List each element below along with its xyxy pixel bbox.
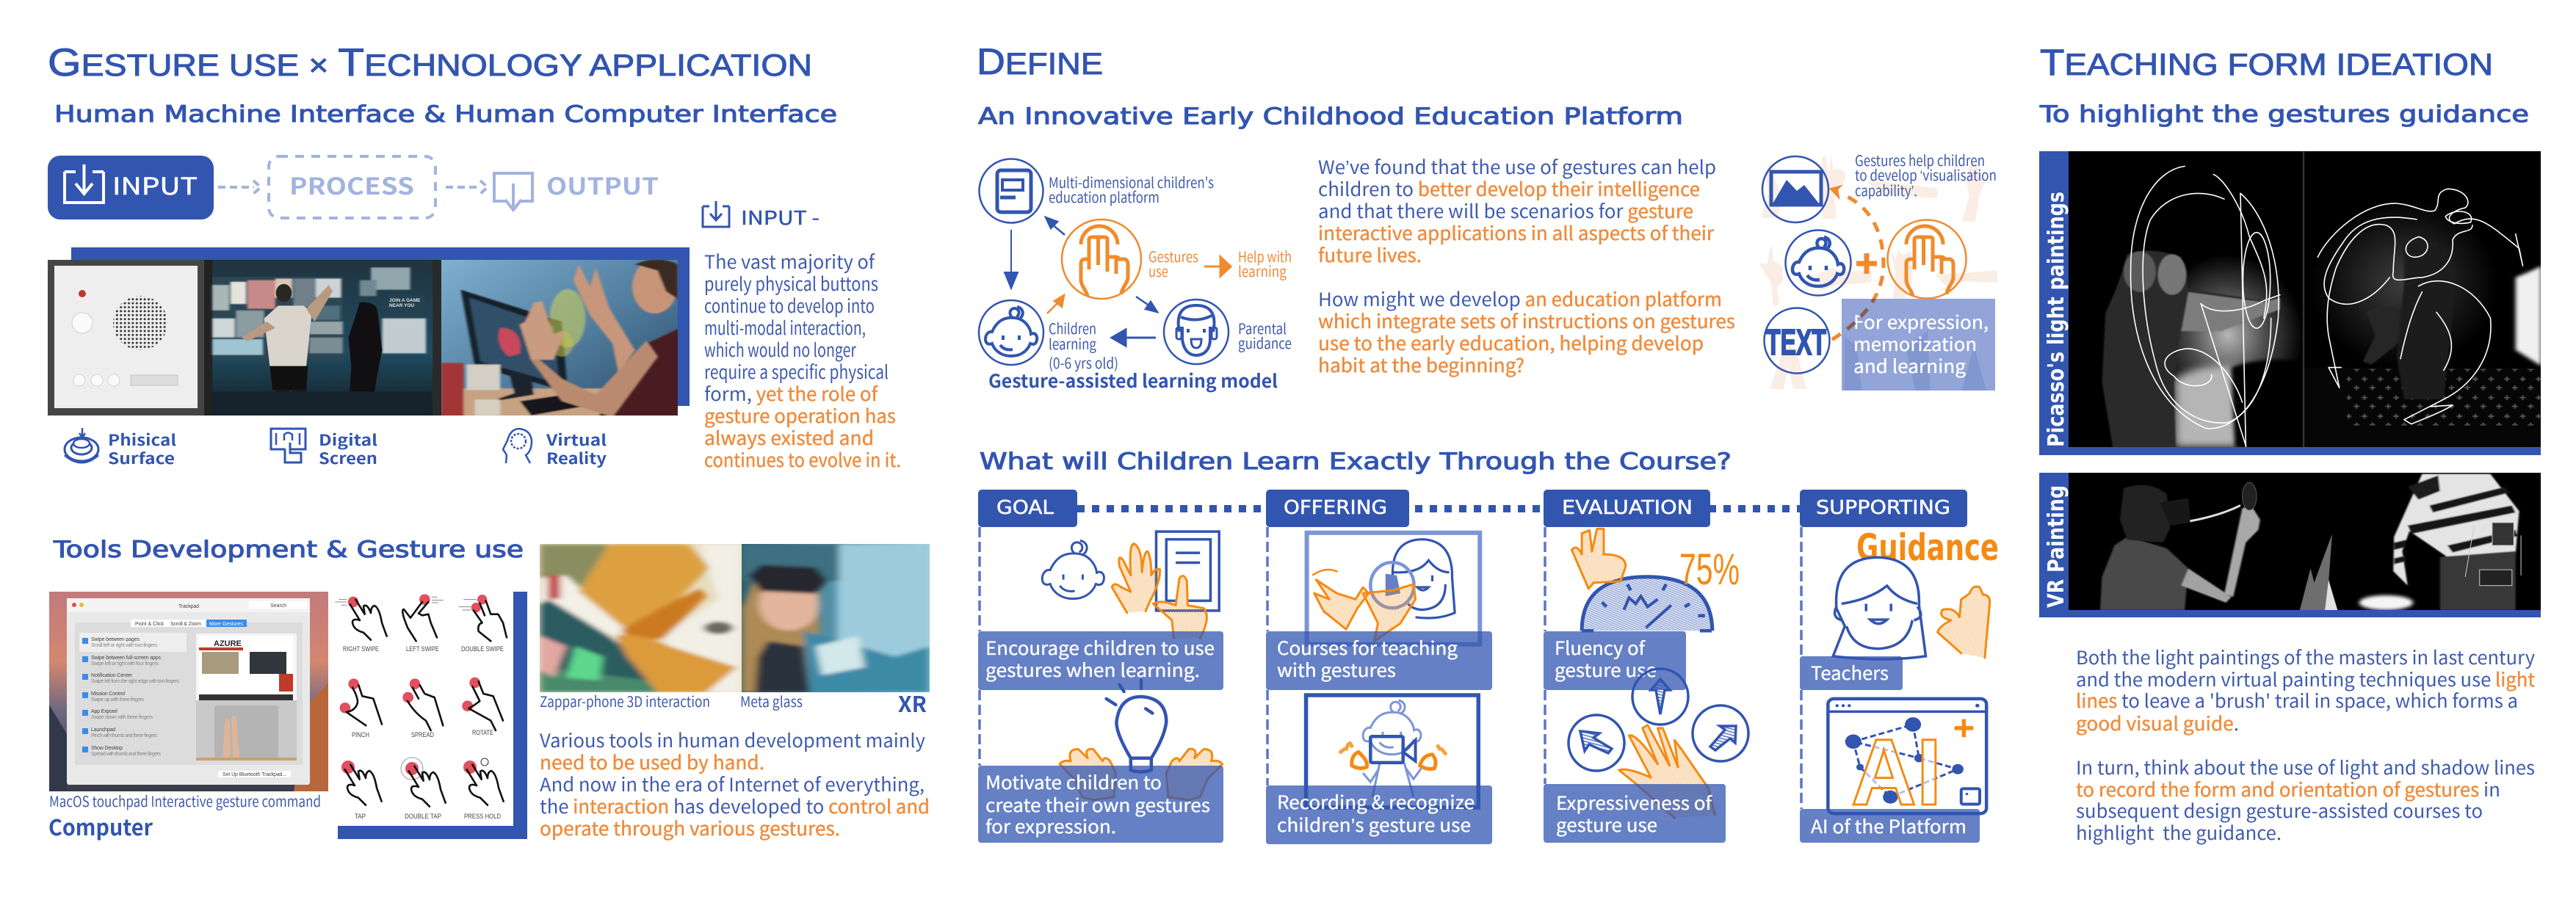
image: macos trackpad settings: Swipe left or right with four fingers [91,661,159,667]
arrow: process to output [446,181,488,194]
header: offering: OFFERING [1284,497,1387,519]
node: children learning: learning [1049,333,1096,354]
timeline connector [1077,505,1800,512]
image: macos trackpad settings: Swipe left from the right edge with two fingers [91,679,179,684]
blue backing rectangle [71,247,690,406]
text: input explanation: continue to develop into [704,291,875,319]
text: help with learning [1238,245,1292,281]
text: light lines explanation: In turn, think about the use of light and shadow lines [2076,753,2535,780]
illustration: ai platform window: AI [1851,720,1942,825]
illustration: gauge with hand [1571,529,1740,631]
image: macos trackpad settings: Scroll left or right with two fingers [91,643,157,648]
text: gestures help children: capability’. [1855,179,1917,200]
text: findings paragraph: How might we develop an education platform [1318,285,1722,312]
circle icon: text: TEXT [1766,323,1826,363]
image: macos trackpad settings: Swipe down with three fingers [91,715,153,720]
image: macos trackpad settings: Launchpad [91,727,115,733]
image: macos trackpad settings: Show Desktop [91,746,123,751]
subheading: human machine interface: Human Machine Interface & Human Computer Interface [54,101,837,128]
text: input explanation: continues to evolve in it. [704,446,901,473]
node: children learning: (0-6 yrs old) [1049,352,1118,373]
node: parental guidance: Parental [1238,317,1287,338]
plus sign [1856,253,1877,274]
image panel: picasso light paintings [2039,151,2541,455]
illustration: recording child [1306,695,1478,807]
input heading: INPUT - [741,203,820,231]
text box: for expression [1842,299,1995,391]
label: virtual reality [503,429,607,469]
text: gestures help children: to develop ‘visualisation [1855,164,1997,185]
image: macos trackpad settings: Swipe up with three fingers [91,697,144,703]
node: platform: education platform [1049,186,1159,207]
node: children learning: Children [1049,317,1096,338]
image: macos trackpad settings [49,592,328,791]
title: teaching form ideation: TEACHING FORM IDEATION [2040,42,2493,83]
gesture: rotate: ROTATE [472,729,493,737]
text box: motivate: for expression. [985,813,1116,839]
header: supporting: SUPPORTING [1816,497,1950,519]
flow: input process output [48,156,659,219]
text box: motivate [978,766,1223,843]
text box: courses: with gestures [1277,656,1396,683]
text box: courses: Courses for teaching [1277,634,1458,661]
header: evaluation [1544,490,1710,527]
image: macos trackpad settings: Scroll & Zoom [170,622,201,627]
image: digital screen wall: NEAR YOU [389,303,414,308]
text: light lines explanation: highlight the guidance. [2076,819,2282,846]
arrow: parent to children [1112,330,1156,346]
text: tools paragraph: the interaction has developed to control and [540,792,930,819]
text box: ai of the platform [1800,809,1980,843]
image: digital screen wall: JOIN A GAME [389,298,421,303]
text: input explanation: always existed and [704,424,874,451]
label: phisical surface [65,428,176,469]
dashed rail [978,527,981,766]
gesture: tap [341,761,382,821]
gesture: double swipe [459,595,507,653]
dashed rail [1800,527,1803,809]
text: input explanation: gesture operation has [704,402,896,429]
side label: vr painting: VR Painting [2044,485,2069,608]
label: digital screen [271,429,377,469]
image: macos trackpad settings: Point & Click [135,622,164,627]
title: gesture use x technology application: GESTURE USE × TECHNOLOGY APPLICATION [48,41,812,84]
text: light lines explanation: good visual guide . [2076,709,2239,736]
caption: macos touchpad: MacOS touchpad Interactive gesture command [49,790,321,811]
text: input explanation: purely physical buttons [704,269,878,297]
dashed arrow [1828,185,1884,342]
text box: teachers: Teachers [1811,659,1889,686]
panel: gesture use x technology application [48,41,930,842]
node: gestures use: use [1148,260,1168,281]
label: virtual reality: Reality [546,447,607,469]
text: input explanation [704,247,901,473]
photo: vr painters [2069,473,2541,610]
dashed rail [1544,527,1546,784]
gesture: spread: SPREAD [411,731,434,739]
subheading: innovative platform: An Innovative Early Childhood Education Platform [978,104,1683,130]
text box: ai of the platform: AI of the Platform [1811,813,1967,839]
text: help with learning: learning [1238,260,1287,281]
text box: recording: Recording & recognize [1277,788,1475,815]
illustration: speech arrows with hand [1569,669,1748,818]
text box: expressiveness [1544,784,1726,843]
illustration: light bulb with hands [1060,680,1223,800]
image: macos trackpad settings: Swipe between full-screen apps [91,656,162,661]
image: macos trackpad settings: Notification Center [91,673,133,678]
illustration: teacher teaching gestures [1307,533,1480,645]
text box: expressiveness: Expressiveness of [1556,789,1712,816]
text: light lines explanation: subsequent design gesture-assisted courses to [2076,796,2483,824]
column: goal [978,490,1223,843]
node: children learning [979,300,1118,373]
dashed rail [1266,527,1269,785]
illustration: ai platform window [1828,699,1986,825]
text: gestures help children [1855,149,1997,200]
header: goal [978,490,1077,527]
gesture: double tap: DOUBLE TAP [405,813,441,821]
text box: encourage [978,631,1223,690]
header: evaluation: EVALUATION [1562,497,1693,519]
text: findings paragraph: and that there will be scenarios for gesture [1318,197,1693,224]
text box: motivate: create their own gestures [985,791,1210,818]
chart: gesture-assisted learning model [979,159,1292,393]
gesture: right swipe [336,597,387,653]
column: evaluation [1544,490,1748,843]
image: macos trackpad settings: Mission Control [91,692,125,697]
text: input explanation: which would no longer [704,335,856,363]
subheading: what will children learn: What will Children Learn Exactly Through the Course? [980,449,1732,475]
image: macos trackpad settings: Trackpad [178,604,199,609]
input button: INPUT [112,168,198,202]
caption: meta glass: Meta glass [740,690,803,711]
text box: teachers [1800,656,1903,690]
diagram: gestures help visualisation [1759,149,1997,391]
text: tools paragraph: operate through various gestures. [540,814,840,841]
image: macos trackpad settings: Search [270,603,286,609]
image: macos trackpad settings: Swipe between pages [91,637,140,642]
arrow: gestures to platform [1046,217,1065,235]
image: zappar phone 3d interaction [540,544,742,692]
text box: expressiveness: gesture use [1556,811,1657,838]
handwritten word: guidance: Guidance [1856,526,1999,569]
text: input explanation: form, yet the role of [704,380,879,407]
text box: for expression: memorization [1853,330,1977,357]
text: findings paragraph: children to better develop their intelligence [1318,175,1700,202]
text: light lines explanation: Both the light paintings of the masters in last century [2076,643,2535,670]
text: gestures help children: Gestures help children [1855,149,1985,170]
text box: encourage: Encourage children to use [985,634,1215,661]
image: virtual reality user [441,259,680,417]
illustration: teacher with ok hand [1833,557,1990,659]
gesture: pinch [340,678,382,739]
gesture: double swipe: DOUBLE SWIPE [461,645,504,653]
gesture: left swipe: LEFT SWIPE [406,645,439,653]
text box: fluency [1544,631,1686,690]
text: findings paragraph: use to the early education, helping develop [1318,329,1704,356]
process dashed box: PROCESS [289,168,414,202]
node: gestures use: Gestures [1148,245,1198,266]
node: parental guidance [1164,300,1292,364]
input heading [703,201,820,231]
label: computer: Computer [48,810,153,842]
subheading: tools development: Tools Development & Gesture use [53,537,524,563]
background hands [1759,156,1997,389]
output [494,168,659,210]
text: findings paragraph [1318,153,1735,378]
image: macos trackpad settings: App Exposé [91,709,117,714]
output: OUTPUT [546,168,659,202]
header: offering [1266,490,1409,527]
text: tools paragraph: And now in the era of Internet of everything, [540,770,925,797]
arrow: gestures to parent [1136,297,1157,312]
circle icon: child [1786,231,1850,295]
title: define: DEFINE [977,41,1103,82]
gesture: press hold [463,758,504,821]
panel: teaching form ideation [2039,42,2541,846]
text: light lines explanation: to record the form and orientation of gestures in [2076,775,2500,802]
circle icon: text [1764,308,1830,373]
text: findings paragraph: future lives. [1318,241,1422,268]
image: physical surface device [48,260,204,415]
label: xr: XR [898,686,927,719]
gesture: tap: TAP [355,813,366,821]
caption: zappar: Zappar-phone 3D interaction [540,690,710,711]
input button [48,156,214,219]
text: help with learning: Help with [1238,245,1292,266]
text: light lines explanation: lines to leave a 'brush' trail in space, which forms a [2076,686,2518,714]
text box: motivate: Motivate children to [985,769,1162,795]
text box: recording [1266,785,1492,844]
text: tools paragraph: need to be used by hand. [540,748,764,775]
image: macos trackpad settings: Set Up Bluetooth Trackpad... [222,772,286,777]
node: gestures use [1062,219,1198,299]
text: tools paragraph [540,726,930,841]
text box: recording: children’s gesture use [1277,811,1471,838]
text box: for expression: For expression, [1853,308,1989,335]
image: digital screen wall [204,260,441,415]
illustration: child with document [1042,531,1219,638]
panel: define [977,41,1999,844]
gesture: spread [402,678,443,739]
label: virtual reality: Virtual [546,429,607,451]
text: findings paragraph: which integrate sets of instructions on gestures [1318,307,1735,334]
text: input explanation: multi-modal interaction, [704,313,866,341]
subheading: highlight guidance: To highlight the gestures guidance [2039,101,2529,128]
text: findings paragraph: habit at the beginning? [1318,351,1524,378]
circle icon: gesture [1887,220,1967,298]
gesture: left swipe [402,594,443,653]
label: phisical surface: Phisical [108,429,176,451]
header: goal: GOAL [996,497,1054,519]
image: macos trackpad settings: Spread with thumb and three fingers [91,752,162,757]
gesture: pinch: PINCH [352,731,369,739]
text box: courses [1266,631,1492,690]
image panel: vr painting [2039,473,2541,617]
gesture: right swipe: RIGHT SWIPE [343,645,379,653]
gesture: double tap [401,758,446,821]
gesture chart: nine hand gestures [336,594,507,821]
text box: fluency: Fluency of [1555,634,1646,661]
arrow: to help with learning [1204,257,1231,276]
illustration: gauge with hand: 75% [1679,545,1740,594]
image: macos trackpad settings: AZURE [214,639,242,648]
label: phisical surface: Surface [108,447,175,469]
label: digital screen: Screen [319,447,377,469]
text: input explanation: require a specific physical [704,357,889,385]
column: offering [1266,490,1492,844]
arrow: platform to children [1005,230,1018,288]
text box: encourage: gestures when learning. [985,656,1200,683]
text: findings paragraph: interactive applications in all aspects of their [1318,219,1714,246]
node: platform [980,159,1214,223]
dashed arrow over box [1846,299,1876,330]
image: meta glass [742,544,930,692]
text box: fluency: gesture use [1555,656,1657,683]
header: supporting [1800,490,1967,527]
side label: picasso: Picasso's light paintings [2044,192,2069,447]
photo: picasso light drawings [2069,151,2541,448]
node: parental guidance: guidance [1238,332,1292,353]
gesture: rotate [462,678,503,737]
process dashed box [269,156,435,218]
column: supporting [1800,490,1999,843]
text: input explanation: The vast majority of [704,247,876,275]
text: light lines explanation: and the modern virtual painting techniques use light [2076,665,2535,692]
caption: gesture-assisted learning model: Gesture-assisted learning model [988,367,1278,393]
gesture: press hold: PRESS HOLD [464,813,501,821]
node: platform: Multi-dimensional children's [1049,171,1214,192]
image: macos trackpad settings: More Gestures [209,622,244,627]
image: macos trackpad settings: Pinch with thumb and three fingers [91,733,157,738]
text box: for expression: and learning [1853,352,1966,379]
text: tools paragraph: Various tools in human development mainly [540,726,925,753]
text: findings paragraph: We’ve found that the use of gestures can help [1318,153,1716,180]
circle icon: image [1762,156,1828,222]
text: light lines explanation [2076,643,2535,846]
arrow: input to process [218,181,261,194]
label: digital screen: Digital [319,429,377,451]
arrow: children to gestures [1047,295,1064,313]
blue L-shaped frame [338,592,527,839]
